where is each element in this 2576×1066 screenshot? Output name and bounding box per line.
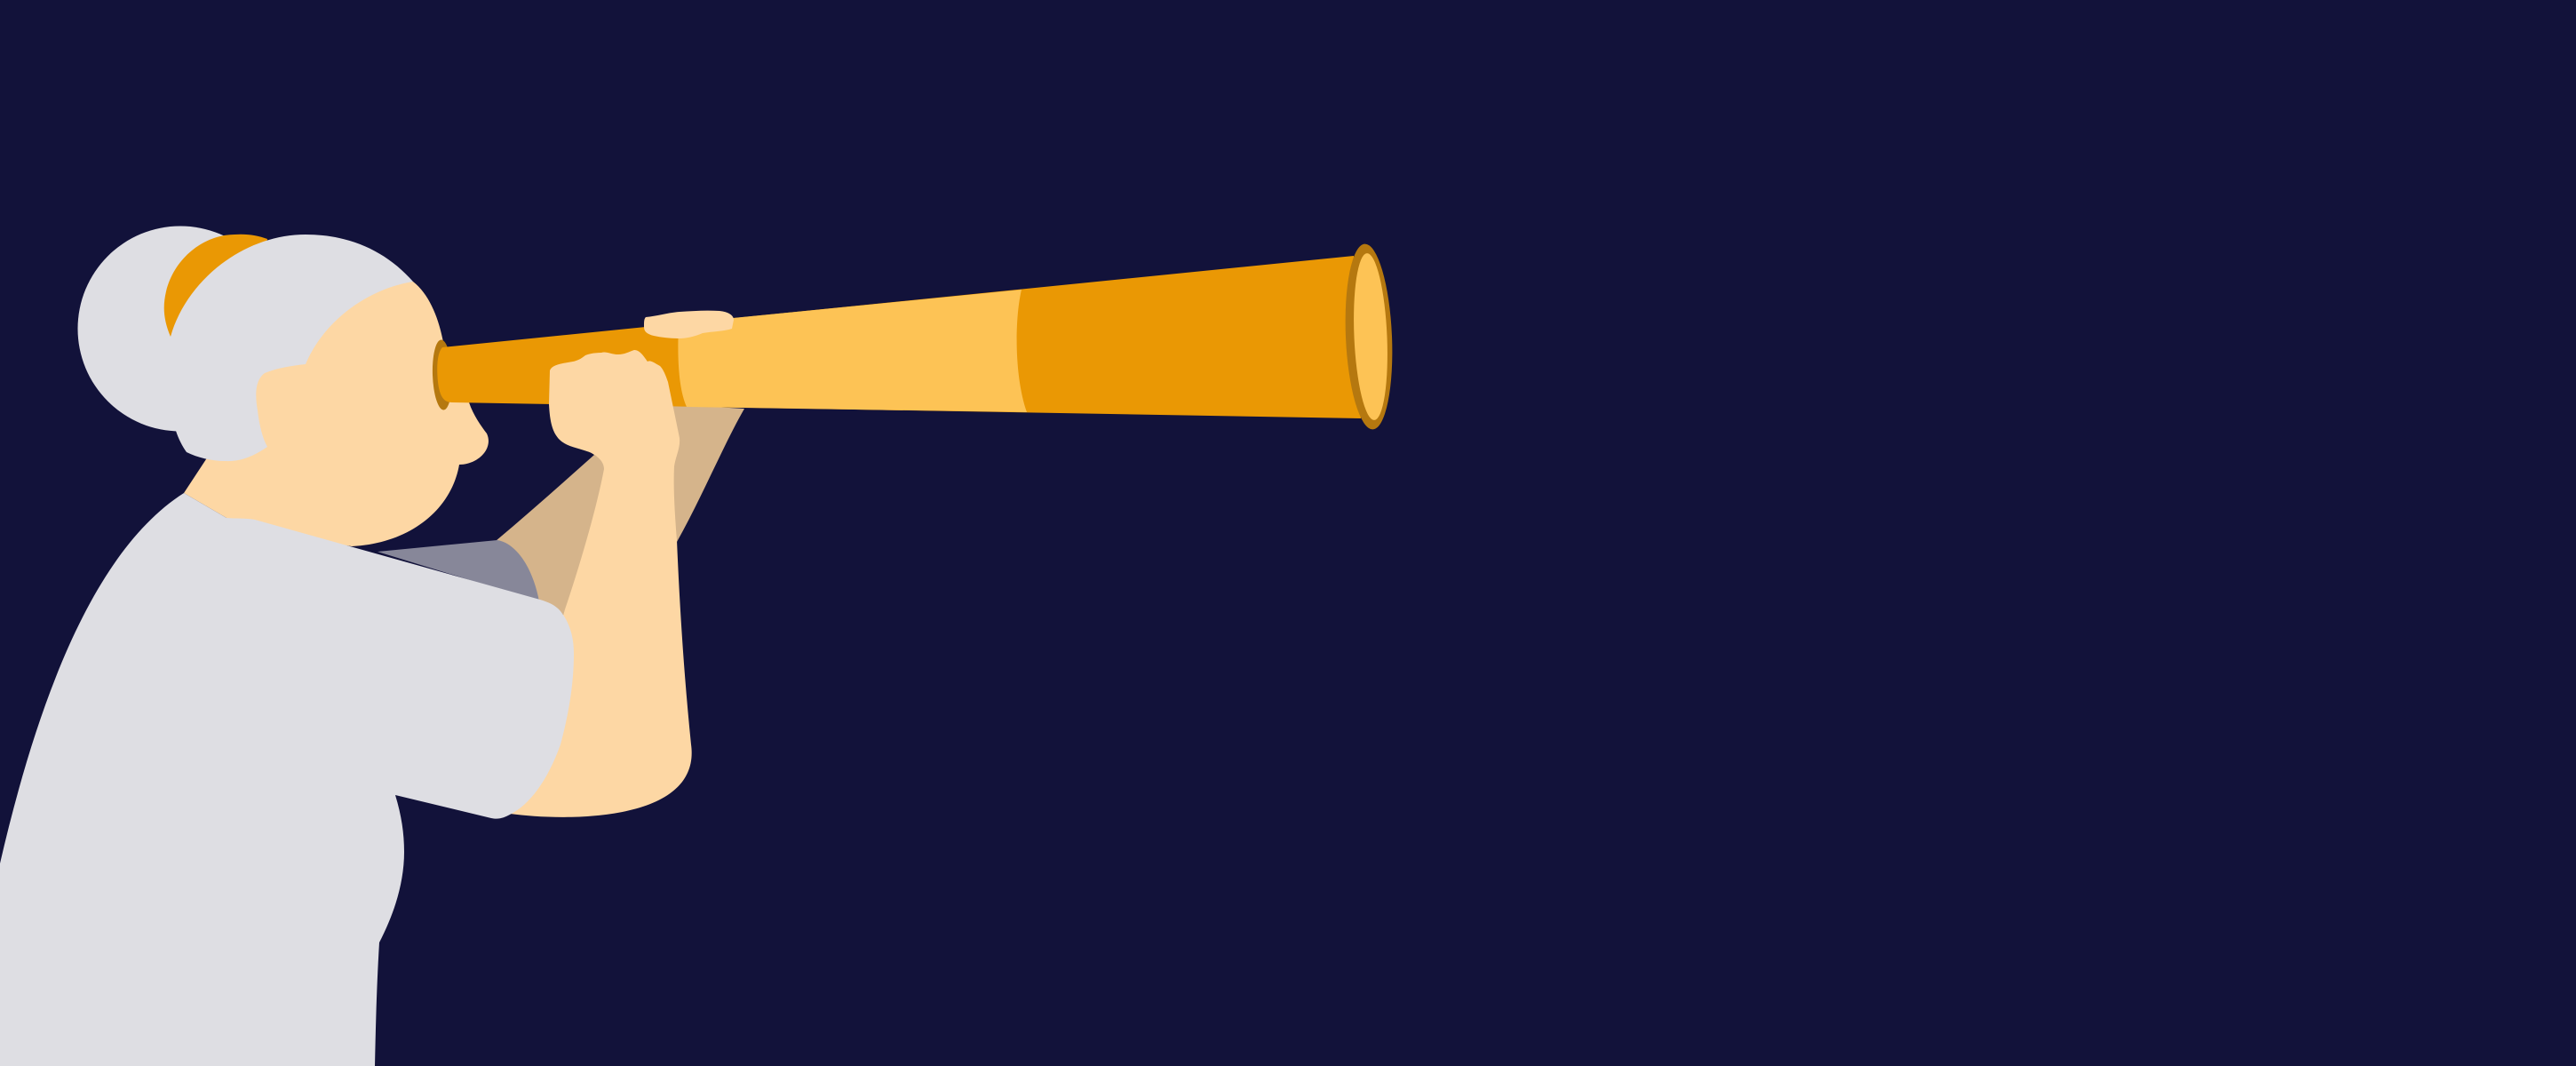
objective outer ring [1341,243,1396,431]
hair band [164,235,267,337]
far arm upper [496,455,622,615]
far arm forearm behind telescope [666,404,744,542]
eyepiece ring [432,339,453,410]
far arm and sleeve [378,404,744,615]
hair front [171,235,413,461]
light middle section [678,290,1027,412]
near arm and fist [510,350,692,817]
hair bun [78,226,282,432]
telescope tube [437,256,1361,418]
far sleeve [378,540,539,601]
neck and face [184,282,489,546]
shirt [0,493,574,1066]
top fingers on telescope [644,311,734,338]
objective lens [1350,252,1391,421]
telescope [432,243,1396,431]
